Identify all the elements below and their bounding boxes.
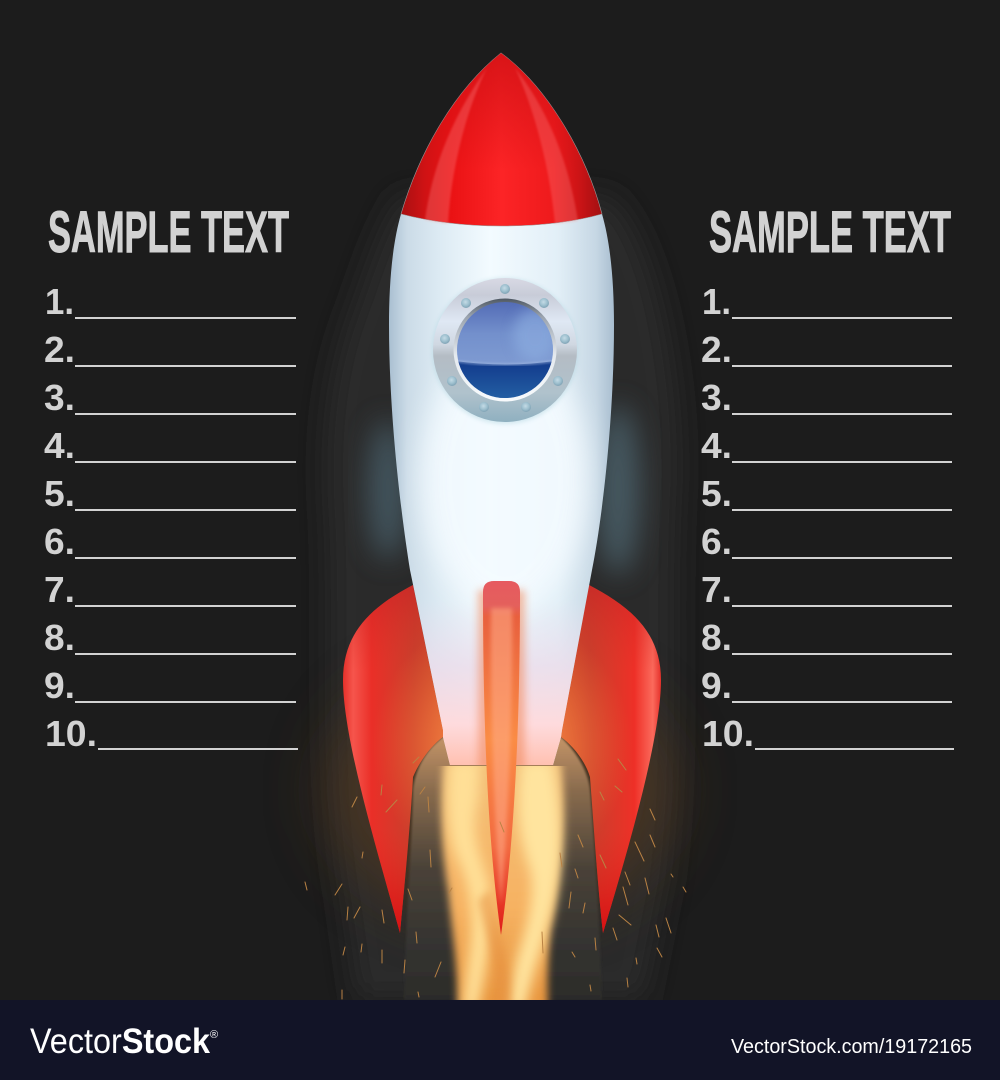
left numbers: 10. [45,713,97,754]
left fin [340,585,450,935]
rocket body [385,214,620,770]
left list panel [44,200,298,754]
right blank lines [732,317,954,750]
left numbers: 5. [44,473,75,514]
left numbers: 3. [44,377,75,418]
right list panel [701,200,954,754]
left heading: SAMPLE TEXT [48,200,289,265]
left numbers: 4. [44,425,75,466]
porthole glass [455,300,557,400]
right numbers: 3. [701,377,732,418]
footer logo: VectorStock [30,1022,210,1061]
right numbers: 1. [702,281,731,322]
porthole [432,278,578,424]
footer bar [0,1000,1000,1080]
porthole rivets [440,284,570,412]
left numbers: 7. [44,569,75,610]
right numbers: 10. [702,713,754,754]
right numbers: 4. [701,425,732,466]
right numbers: 6. [701,521,732,562]
left numbers: 1. [45,281,74,322]
right numbers: 8. [701,617,732,658]
right numbers: 9. [701,665,732,706]
left blank lines [75,317,298,750]
left numbers: 2. [44,329,75,370]
right numbers: 7. [701,569,732,610]
right numbers: 5. [701,473,732,514]
registered mark: ® [210,1029,218,1041]
flame [442,756,563,1010]
footer image id: VectorStock.com/19172165 [731,1036,972,1058]
right fin [555,585,665,935]
right numbers [701,281,754,754]
sparks [305,757,686,999]
center fin [483,581,520,935]
exhaust smoke plume [404,737,602,1000]
left numbers: 9. [44,665,75,706]
nose cone [401,53,602,226]
smoke glow behind rocket [324,195,680,1000]
left numbers [44,281,97,754]
right numbers: 2. [701,329,732,370]
left numbers: 8. [44,617,75,658]
left numbers: 6. [44,521,75,562]
